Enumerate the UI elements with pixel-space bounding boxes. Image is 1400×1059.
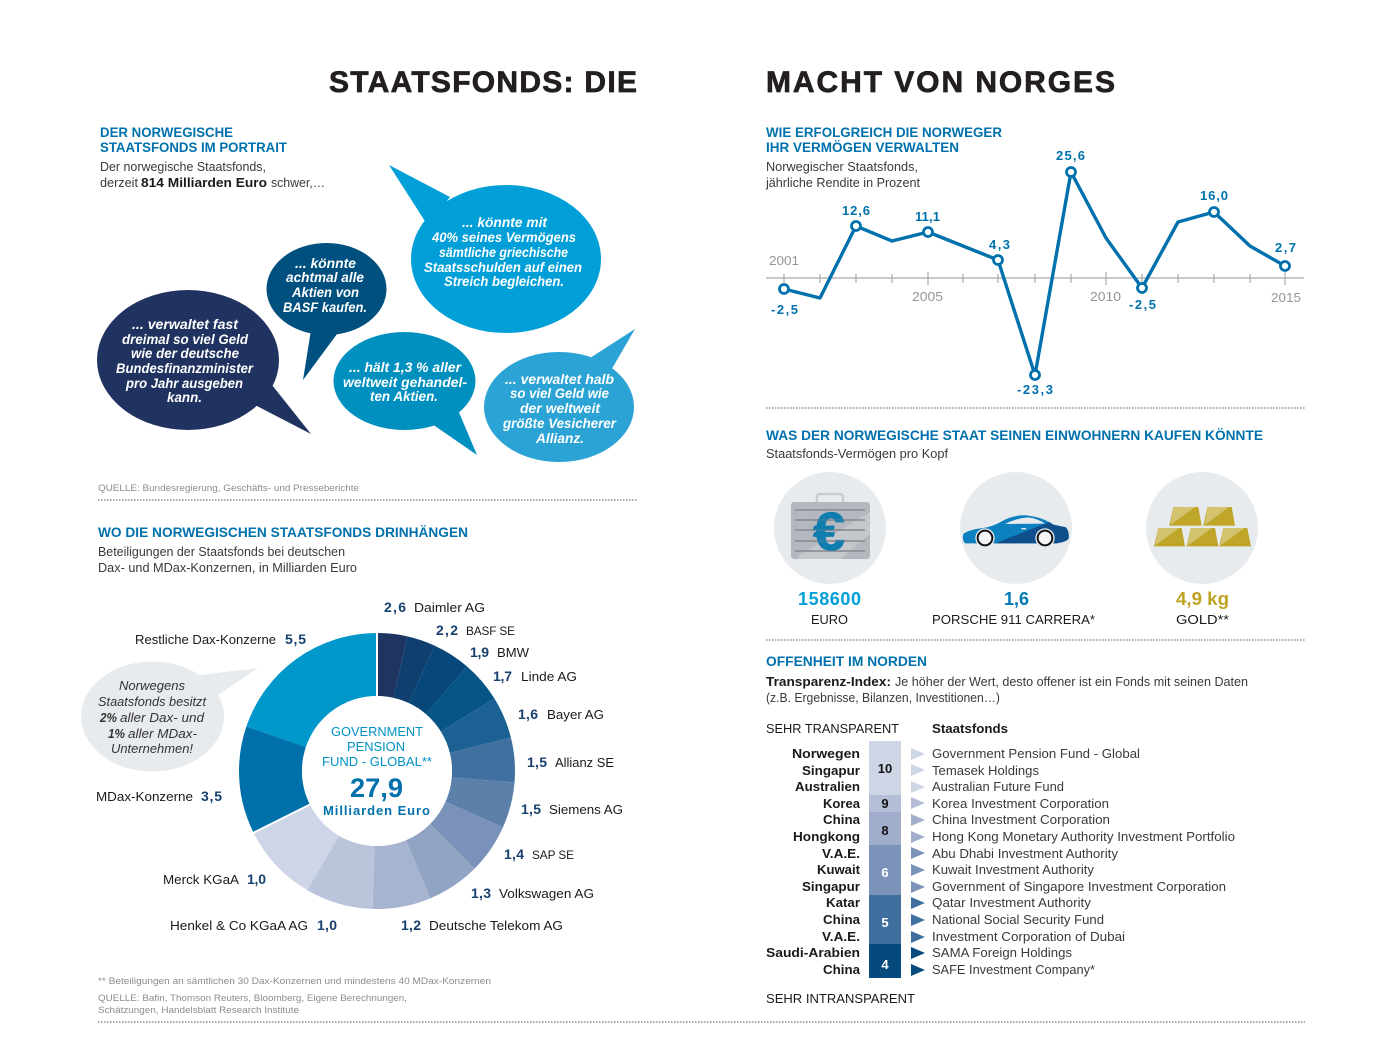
footnote and source: QUELLE: Bafin, Thomson Reuters, Bloomberg, Eigene Berechnungen, — [98, 993, 407, 1004]
country names: Australien — [795, 779, 860, 794]
fund names: SAMA Foreign Holdings — [932, 945, 1073, 960]
title — [329, 66, 1115, 99]
donut labels: 1,4 — [504, 846, 524, 862]
year labels: 2001 — [769, 254, 799, 268]
donut centre text: PENSION — [347, 739, 405, 754]
fund names: Australian Future Fund — [932, 779, 1064, 794]
intro text: schwer,… — [271, 176, 325, 190]
callout: Dax-Anteil: 1% — [108, 727, 125, 741]
donut chart — [253, 633, 484, 878]
donut centre text: FUND - GLOBAL** — [322, 754, 432, 769]
donut labels: 1,9 — [470, 644, 489, 660]
return line — [784, 172, 1285, 375]
country names: Kuwait — [817, 862, 861, 877]
donut labels: Deutsche Telekom AG — [429, 918, 563, 933]
speech bubble: Allianz: der weltweit — [520, 401, 601, 416]
country names: V.A.E. — [822, 846, 860, 861]
speech bubble: Bundesfinanzminister: Bundesfinanzminister — [116, 361, 254, 376]
stat: Porsche — [932, 589, 1095, 627]
donut centre text: Milliarden Euro — [323, 803, 430, 818]
title: STAATSFONDS: DIE — [329, 66, 637, 99]
intro text: derzeit — [100, 176, 139, 190]
row arrows — [911, 748, 925, 976]
speech bubble: Aktien: ... hält 1,3 % aller — [349, 360, 462, 375]
subtitle: Rendite: jährliche Rendite in Prozent — [765, 176, 921, 190]
fund names: Kuwait Investment Authority — [932, 862, 1094, 877]
intro: Transparenz-Index — [766, 675, 1248, 705]
fund names: National Social Security Fund — [932, 912, 1104, 927]
heading: Offenheit: OFFENHEIT IM NORDEN — [766, 654, 927, 669]
fund names: Abu Dhabi Investment Authority — [932, 846, 1119, 861]
donut labels: Volkswagen AG — [499, 886, 594, 901]
intro: Transparenz-Index: Transparenz-Index: — [766, 675, 891, 689]
donut labels: 1,0 — [247, 871, 266, 887]
heading: Rendite: WIE ERFOLGREICH DIE NORWEGER — [766, 125, 1002, 140]
country names: V.A.E. — [822, 929, 860, 944]
country names — [766, 746, 861, 977]
fund names: Korea Investment Corporation — [932, 796, 1109, 811]
donut labels: Allianz SE — [555, 755, 614, 770]
heading: Pro-Kopf: WAS DER NORWEGISCHE STAAT SEINEN EINWOHNERN KAUFEN KÖNNTE — [766, 428, 1263, 443]
donut labels: Merck KGaA — [163, 872, 239, 887]
subtitle: Beteiligungen — [98, 545, 357, 575]
callout: Dax-Anteil: aller Dax- und — [120, 711, 205, 725]
column header: Staatsfonds: Staatsfonds — [932, 721, 1008, 736]
donut labels: 2,6 — [384, 599, 406, 615]
country names: China — [823, 912, 861, 927]
donut labels: Restliche Dax-Konzerne — [135, 632, 276, 647]
donut labels: 2,2 — [436, 622, 458, 638]
fund names: Government of Singapore Investment Corporation — [932, 879, 1226, 894]
callout: Dax-Anteil: aller MDax- — [128, 727, 197, 741]
footnote and source: ** Beteiligungen an sämtlichen 30 Dax-Konzernen und mindestens 40 MDax-Konzernen — [98, 976, 491, 987]
country names: Saudi-Arabien — [766, 945, 860, 960]
fund names: Temasek Holdings — [932, 763, 1040, 778]
donut labels — [96, 599, 623, 933]
speech bubble: BASF: ... könnte — [295, 256, 356, 271]
speech bubble: Aktien: weltweit gehandel- — [343, 375, 468, 390]
stat: Euro: EURO — [811, 612, 848, 627]
panel: Pro-Kopf — [766, 428, 1263, 627]
speech bubble: BASF: achtmal alle — [286, 270, 364, 285]
donut labels: 1,5 — [527, 754, 547, 770]
intro text: Der norwegische Staatsfonds, — [100, 160, 266, 174]
source: portrait: QUELLE: Bundesregierung, Geschäfts- und Presseberichte — [98, 483, 359, 494]
scale label: top: SEHR TRANSPARENT — [766, 721, 899, 736]
data labels: 25,6 — [1056, 148, 1085, 163]
footnote and source — [98, 976, 491, 1016]
fund names: Qatar Investment Authority — [932, 895, 1092, 910]
footnote and source: Schätzungen, Handelsblatt Research Institute — [98, 1005, 299, 1016]
intro text — [100, 160, 325, 190]
donut labels: 1,5 — [521, 801, 541, 817]
data point markers — [780, 168, 1290, 380]
callout: Dax-Anteil: Norwegens — [119, 679, 185, 693]
data labels: 2,7 — [1275, 240, 1296, 255]
subtitle: Pro-Kopf: Staatsfonds-Vermögen pro Kopf — [766, 447, 949, 461]
donut labels: BASF SE — [466, 624, 515, 638]
donut labels: Daimler AG — [414, 600, 485, 615]
speech bubble: Griechenland: Staatsschulden auf einen — [424, 260, 582, 275]
donut centre text: GOVERNMENT — [331, 724, 423, 739]
speech bubble: Allianz: so viel Geld wie — [510, 386, 609, 401]
fund names: China Investment Corporation — [932, 812, 1110, 827]
data labels: 16,0 — [1200, 188, 1228, 203]
speech bubble: Griechenland: 40% seines Vermögens — [431, 230, 576, 245]
speech bubble: Bundesfinanzminister: wie der deutsche — [131, 346, 239, 361]
stat: Porsche: PORSCHE 911 CARRERA* — [932, 612, 1095, 627]
subtitle: Beteiligungen: Beteiligungen der Staatsfonds bei deutschen — [98, 545, 345, 559]
year labels: 2015 — [1271, 291, 1301, 305]
donut labels: Bayer AG — [547, 707, 604, 722]
fund names: Hong Kong Monetary Authority Investment Portfolio — [932, 829, 1235, 844]
donut labels: SAP SE — [532, 848, 574, 862]
donut labels: 1,6 — [518, 706, 538, 722]
stat: Gold: GOLD** — [1176, 612, 1229, 627]
callout: Dax-Anteil: 2% — [99, 711, 117, 725]
callout: Dax-Anteil: Staatsfonds besitzt — [98, 695, 207, 709]
stat: Gold: 4,9 kg — [1176, 589, 1229, 609]
speech bubble: Bundesfinanzminister: dreimal so viel Geld — [122, 332, 249, 347]
panel: Beteiligungen — [81, 525, 623, 1016]
speech bubble: Griechenland: ... könnte mit — [462, 215, 548, 230]
transparency scale bar: 4 — [881, 957, 889, 972]
transparency scale bar — [869, 741, 901, 978]
speech bubble: Aktien: ten Aktien. — [370, 389, 438, 404]
donut labels: 1,7 — [493, 668, 512, 684]
heading: Rendite — [766, 125, 1002, 155]
donut labels: 1,3 — [471, 885, 491, 901]
panel: portrait — [97, 125, 635, 494]
speech bubble: Griechenland: sämtliche griechische — [439, 245, 568, 260]
subtitle: Beteiligungen: Dax- und MDax-Konzernen, in Milliarden Euro — [98, 561, 357, 575]
callout: Dax-Anteil: Unternehmen! — [111, 742, 194, 756]
data labels: -2,5 — [771, 302, 798, 317]
donut labels: 5,5 — [285, 631, 306, 647]
year labels: 2010 — [1090, 290, 1121, 304]
transparency scale bar: 5 — [881, 915, 889, 930]
donut labels: 1,2 — [401, 917, 421, 933]
intro: Transparenz-Index: (z.B. Ergebnisse, Bilanzen, Investitionen…) — [766, 691, 1000, 705]
transparency scale bar: 10 — [878, 761, 892, 776]
fund names — [932, 746, 1235, 977]
icon: gold bars — [1146, 472, 1258, 584]
heading: portrait: DER NORWEGISCHE — [100, 125, 233, 140]
panel: Rendite — [765, 125, 1304, 397]
data labels: 4,3 — [989, 237, 1010, 252]
donut labels: MDax-Konzerne — [96, 789, 193, 804]
donut labels: Linde AG — [521, 669, 577, 684]
speech bubble: Bundesfinanzminister: kann. — [167, 390, 202, 405]
heading: portrait — [100, 125, 288, 155]
intro: Transparenz-Index: Je höher der Wert, desto offener ist ein Fonds mit seinen Daten — [895, 675, 1248, 689]
icon: briefcase with euro: € — [813, 502, 845, 562]
icon: sports car — [960, 472, 1072, 584]
heading: Rendite: IHR VERMÖGEN VERWALTEN — [766, 140, 959, 155]
speech bubble: Allianz: ... verwaltet halb — [505, 372, 614, 387]
title: MACHT VON NORGES — [766, 66, 1115, 99]
chart axis — [766, 272, 1304, 285]
donut labels: 1,0 — [317, 917, 337, 933]
subtitle: Rendite — [765, 160, 921, 190]
heading: portrait: STAATSFONDS IM PORTRAIT — [100, 140, 288, 155]
stat: Euro: 158600 — [798, 589, 861, 609]
fund names: SAFE Investment Company* — [932, 962, 1095, 977]
panel: Transparenz-Index — [766, 654, 1248, 1006]
speech bubble: Bundesfinanzminister — [97, 290, 311, 434]
speech bubble: BASF: BASF kaufen. — [283, 300, 367, 315]
donut centre text — [322, 724, 432, 818]
country names: Korea — [823, 796, 861, 811]
donut centre text: 27,9 — [350, 773, 403, 803]
country names: Hongkong — [793, 829, 860, 844]
heading: Beteiligungen: WO DIE NORWEGISCHEN STAATSFONDS DRINHÄNGEN — [98, 525, 468, 540]
speech bubble: Bundesfinanzminister: pro Jahr ausgeben — [125, 376, 243, 391]
speech bubble: BASF: Aktien von — [291, 285, 359, 300]
country names: China — [823, 812, 861, 827]
data labels: 12,6 — [842, 203, 870, 218]
speech bubble: Griechenland — [389, 165, 601, 333]
donut labels: 3,5 — [201, 788, 222, 804]
data labels: 11,1 — [915, 209, 940, 224]
fund names: Government Pension Fund - Global — [932, 746, 1140, 761]
speech bubble: Allianz: Allianz. — [535, 431, 584, 446]
year labels — [769, 254, 1301, 305]
scale label: bottom: SEHR INTRANSPARENT — [766, 991, 915, 1006]
stat: Gold — [1176, 589, 1229, 627]
speech bubble: Bundesfinanzminister: ... verwaltet fast — [132, 317, 239, 332]
country names: Singapur — [802, 763, 860, 778]
fund names: Investment Corporation of Dubai — [932, 929, 1125, 944]
transparency scale bar: 6 — [881, 865, 889, 880]
donut labels: Henkel & Co KGaA AG — [170, 918, 308, 933]
donut labels: BMW — [497, 645, 530, 660]
icon: briefcase with euro — [774, 472, 886, 584]
speech bubble: Aktien — [334, 332, 477, 455]
line chart — [766, 148, 1304, 397]
intro text: 814 Milliarden Euro — [141, 176, 267, 190]
data labels: -2,5 — [1129, 297, 1156, 312]
transparency scale bar: 8 — [881, 823, 889, 838]
subtitle: Rendite: Norwegischer Staatsfonds, — [766, 160, 918, 174]
country names: China — [823, 962, 861, 977]
transparency scale bar: 9 — [881, 796, 889, 811]
stat: Porsche: 1,6 — [1004, 589, 1029, 609]
data labels: -23,3 — [1017, 382, 1053, 397]
country names: Norwegen — [792, 746, 860, 761]
speech bubble: Allianz: größte Vesicherer — [502, 416, 617, 431]
data labels — [771, 148, 1296, 397]
callout: Dax-Anteil — [81, 662, 258, 772]
country names: Katar — [826, 895, 860, 910]
speech bubble: Allianz — [484, 329, 635, 462]
country names: Singapur — [802, 879, 860, 894]
donut labels: Siemens AG — [549, 802, 623, 817]
speech bubble: BASF — [266, 243, 386, 380]
year labels: 2005 — [912, 290, 943, 304]
speech bubble: Griechenland: Streich begleichen. — [444, 274, 564, 289]
stat: Euro — [798, 589, 861, 627]
